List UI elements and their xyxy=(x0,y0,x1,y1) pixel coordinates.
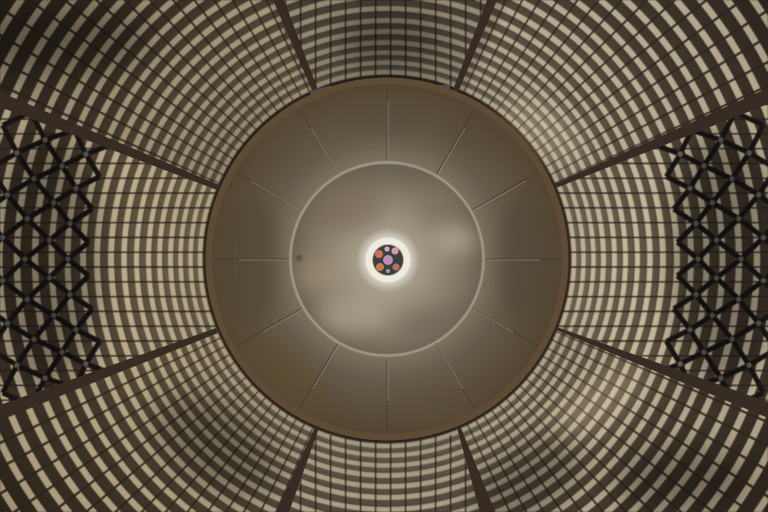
left triangular lattice xyxy=(0,105,112,413)
top and bottom section glazing bars xyxy=(284,0,496,512)
right triangular lattice xyxy=(654,105,768,413)
small vent xyxy=(296,254,302,262)
inner dome light rays xyxy=(294,182,480,339)
rib joints xyxy=(310,85,450,97)
panel lighting xyxy=(228,204,535,386)
panel seams xyxy=(213,85,561,433)
outer ring panels xyxy=(212,84,562,434)
stained glass medallion xyxy=(372,244,404,276)
oculus white ring xyxy=(366,238,410,282)
oculus glow xyxy=(356,228,420,292)
weld seam around inner dome xyxy=(290,162,484,356)
outer bronze ring xyxy=(206,78,568,440)
inner dome disc xyxy=(291,160,483,355)
panel seam highlights xyxy=(239,101,541,401)
side section glazing bars xyxy=(0,104,768,416)
